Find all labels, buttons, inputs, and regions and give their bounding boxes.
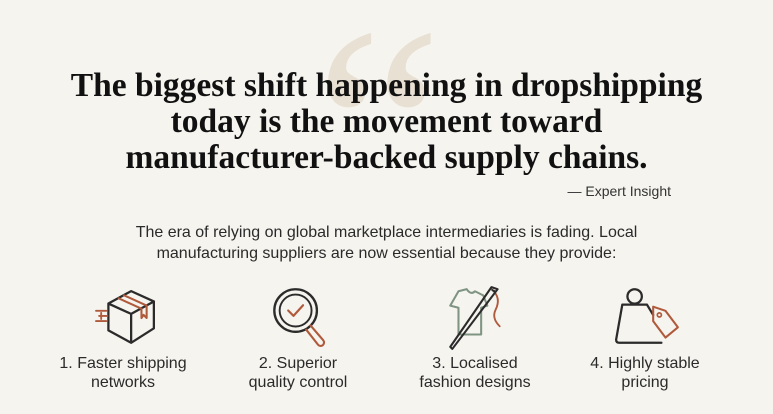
- label 4: [590, 355, 700, 391]
- label 4: pricing: [621, 374, 669, 391]
- label 2: quality control: [249, 374, 347, 391]
- title quote: The biggest shift happening in dropshipping: [71, 67, 702, 104]
- label 1: [59, 355, 187, 391]
- icon: shirt and needle: [449, 286, 501, 350]
- icon: magnifier: [273, 288, 326, 347]
- label 1: networks: [91, 374, 155, 391]
- icon: weight with tag: [615, 288, 679, 344]
- intro paragraph: The era of relying on global marketplace intermediaries is fading. Local: [136, 224, 637, 241]
- intro paragraph: manufacturing suppliers are now essential because they provide:: [157, 245, 616, 262]
- label 3: [419, 355, 531, 391]
- icon: box: [95, 290, 155, 344]
- title quote: manufacturer-backed supply chains.: [125, 139, 648, 176]
- label 2: [249, 355, 347, 391]
- attribution: — Expert Insight: [568, 183, 671, 199]
- label 3: fashion designs: [419, 374, 531, 391]
- label 2: 2. Superior: [259, 355, 337, 372]
- label 4: 4. Highly stable: [590, 355, 700, 372]
- title quote: [71, 67, 702, 176]
- label 1: 1. Faster shipping: [59, 355, 187, 372]
- intro paragraph: [136, 224, 637, 262]
- label 3: 3. Localised: [432, 355, 518, 372]
- title quote: today is the movement toward: [171, 103, 602, 140]
